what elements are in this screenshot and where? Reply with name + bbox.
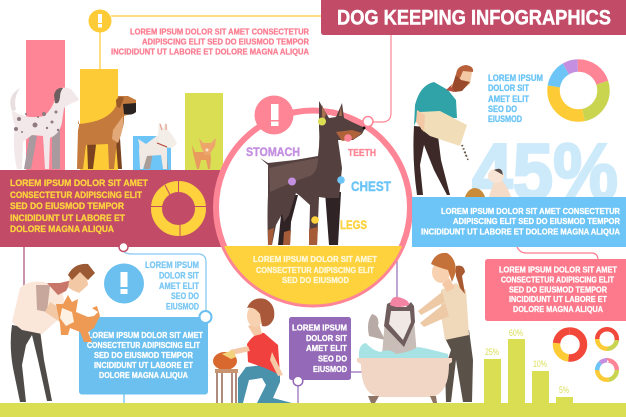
text: circle: CONSECTETUR ADIPISCING ELIT: [256, 265, 375, 275]
illustration: man holding corgi: [11, 264, 95, 402]
illustration: kneeling woman: [230, 298, 292, 403]
text: blue lower panel: SED DO EIUSMOD TEMPOR: [94, 350, 194, 360]
line: pink top connector: [373, 35, 391, 122]
text block: blue callout: LOREM IPSUM: [145, 260, 199, 270]
labels: anatomy: LEGS: [340, 218, 367, 232]
panel: blue lower: [79, 317, 208, 394]
text block: blue donut caption: [488, 73, 543, 124]
panel: central circle: [213, 110, 413, 308]
bar chart: percentages: 25%: [485, 347, 499, 357]
connector node: purple: [293, 376, 303, 386]
labels: anatomy: CHEST: [351, 178, 391, 194]
title banner: [321, 0, 626, 35]
text: blue lower panel: INCIDIDUNT UT LABORE ET: [94, 360, 194, 370]
bar chart: dog sizes: [26, 40, 223, 170]
bar chart: percentages: 5%: [559, 385, 569, 395]
text block: blue callout: SEO DO: [171, 291, 199, 301]
bar chart: percentages: [484, 328, 573, 404]
connector node: blue: [200, 311, 212, 323]
icon: yellow alert: [88, 10, 112, 32]
text block: top: ADIPISCING ELIT SED DO EIUSMOD TEMPOR: [142, 36, 310, 46]
text: blue lower panel: DOLORE MAGNA ALIQUA: [99, 370, 188, 380]
panel: blue right: [412, 197, 626, 247]
marker dots: [288, 118, 352, 224]
panel: magenta left: [0, 170, 222, 247]
illustration: chihuahua: [192, 138, 216, 169]
connector line: top yellow: [100, 16, 322, 69]
text: magenta panel: INCIDIDUNT UT LABORE ET: [10, 212, 125, 223]
text block: top: INCIDIDUNT UT LABORE ET DOLORE MAGNA ALIQUA: [111, 46, 309, 56]
icon: pink alert: [254, 96, 294, 134]
text: purple panel: EIUSMOD: [313, 364, 347, 374]
chart: small donut two: [597, 360, 617, 380]
text: magenta panel: SED DO EIUSMOD TEMPOR: [10, 200, 124, 211]
text block: blue callout: DOLOR SIT: [159, 270, 200, 280]
text: magenta panel: [10, 177, 148, 234]
line: purple stem: [298, 372, 362, 403]
connector node: pink: [363, 116, 373, 126]
line: pink connector right: [517, 247, 598, 259]
text: circle: [253, 254, 378, 285]
text: magenta panel: DOLORE MAGNA ALIQUA: [10, 223, 114, 234]
text: purple panel: LOREM IPSUM: [292, 322, 347, 332]
illustration: food bowl: [465, 188, 485, 197]
illustration: dog on table: [213, 350, 238, 403]
chart: multicolor donut: [554, 66, 604, 116]
illustration: woman bathing husky: [418, 253, 473, 402]
icon: blue alert: [104, 264, 144, 304]
labels: anatomy: STOMACH: [246, 145, 300, 159]
text: circle: LOREM IPSUM DOLOR SIT AMET: [253, 254, 378, 264]
illustration: bull terrier: [138, 122, 177, 169]
illustration: bathtub: [357, 358, 452, 403]
line: blue callout outline: [124, 252, 206, 312]
chart: small donut one: [597, 329, 617, 349]
text: pink panel: [499, 264, 618, 314]
bar chart: percentages: 10%: [533, 359, 547, 369]
text: blue lower panel: LOREM IPSUM DOLOR SIT AMET: [88, 330, 204, 340]
text: blue panel: [421, 206, 621, 236]
labels: anatomy: TEETH: [348, 148, 376, 159]
chart: yellow donut: [151, 181, 206, 236]
text: purple panel: DOLOR SIT: [306, 333, 348, 343]
line: blue stem: [123, 394, 125, 403]
text block: blue donut caption: DOLOR SIT: [488, 83, 530, 93]
chart: red yellow donut: [556, 331, 584, 358]
text: purple panel: SEO DO: [318, 354, 347, 364]
text: magenta panel: LOREM IPSUM DOLOR SIT AMET: [10, 177, 148, 188]
text: purple panel: [292, 322, 348, 374]
illustration: dalmatian: [10, 88, 79, 169]
text: pink panel: INCIDIDUNT UT LABORE ET: [509, 294, 608, 304]
text block: blue donut caption: SEO DO: [488, 104, 517, 114]
text: circle: SED DO EIUSMOD: [282, 275, 349, 285]
text: pink panel: SED DO EIUSMOD TEMPOR: [509, 284, 608, 294]
text: blue lower panel: CONSECTETUR ADIPISCING ELIT: [87, 340, 201, 350]
connector node: magenta: [119, 242, 128, 252]
text block: blue callout: [145, 260, 200, 312]
text block: blue donut caption: LOREM IPSUM: [488, 73, 543, 83]
text block: blue callout: AMET ELIT: [159, 281, 200, 291]
text: purple panel: AMET ELIT: [306, 343, 348, 353]
labels: anatomy: [246, 145, 391, 232]
text block: blue donut caption: EIUSMOD: [488, 114, 522, 124]
illustration: corgi: [56, 295, 100, 342]
text: pink panel: DOLORE MAGNA ALIQUA: [513, 304, 603, 314]
illustration: boxer: [77, 96, 136, 169]
line: magenta left connector: [23, 247, 25, 306]
panel: pink right: [485, 259, 626, 321]
ground strip: [0, 403, 626, 417]
illustration: man pouring food: [413, 65, 473, 195]
panel: purple: [289, 317, 351, 380]
bar chart: percentages: 60%: [509, 328, 523, 338]
illustration: husky: [368, 297, 417, 355]
text: magenta panel: CONSECTETUR ADIPISCING ELIT: [10, 189, 142, 200]
text block: blue callout: EIUSMOD: [166, 302, 199, 312]
text block: top: [111, 26, 310, 56]
text: blue lower panel: [87, 330, 204, 380]
illustration: bath foam: [359, 343, 448, 358]
illustration: doberman: [260, 101, 366, 245]
text block: top: LOREM IPSUM DOLOR SIT AMET CONSECTETUR: [130, 26, 310, 36]
illustration: pug: [488, 169, 511, 197]
line: purple connector: [396, 246, 398, 306]
text block: blue donut caption: AMET ELIT: [488, 94, 530, 104]
